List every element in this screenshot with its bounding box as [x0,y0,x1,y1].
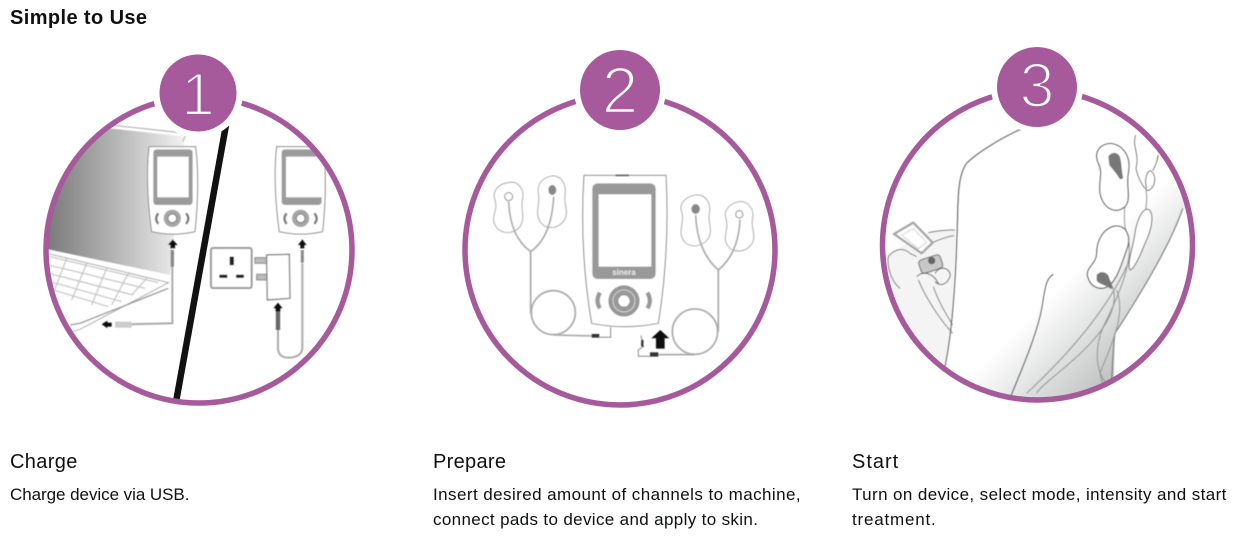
step 3 text: Turn on device, select mode, intensity and start [852,485,1227,504]
step 1 text: Charge device via USB. [10,485,189,504]
step 2 text: connect pads to device and apply to skin. [433,510,758,529]
right pads and cable [638,195,754,357]
panel: step 1 charge illustration [40,48,352,403]
circle ring [882,90,1192,400]
armpit outline [1135,135,1158,191]
step 2 heading: Prepare [433,451,506,473]
lower pad [1087,226,1129,289]
circle ring [46,97,352,403]
divider line [176,125,226,402]
arm and hands at left [883,223,956,365]
charger plug [255,254,290,300]
device right [275,147,325,234]
step 1 heading: Charge [10,451,78,473]
device [583,175,667,327]
step 3 text: treatment. [852,510,937,529]
illustrations [43,47,1196,408]
device left [147,147,198,234]
laptop keyboard [40,252,168,332]
arrow up [651,330,669,349]
laptop screen [43,128,185,275]
step 3 heading: Start [852,451,899,473]
upper pad [1097,143,1129,210]
panel: step 2 prepare illustration [465,44,775,405]
skin shading [945,127,1187,407]
circle ring [465,95,775,405]
number badge 2: 2 [602,53,638,127]
title: Simple to Use [10,7,147,29]
body outline [945,127,1025,367]
narrow pad [1129,209,1152,270]
number badge 2 [574,44,666,136]
step 2 text: Insert desired amount of channels to machine, [433,485,801,504]
device: sinera [612,268,636,277]
step 2 text [433,485,801,529]
step 3 text [852,485,1227,529]
number badge 1: 1 [181,61,215,128]
number badge 3 [991,41,1083,133]
panel: step 3 start illustration [882,41,1192,407]
wall socket [211,248,252,288]
left pads and cable [494,176,611,338]
charger cable [273,239,307,358]
usb cable left [102,239,178,328]
number badge 1 [153,48,243,138]
cables [1027,180,1147,393]
number badge 3: 3 [1019,51,1055,121]
